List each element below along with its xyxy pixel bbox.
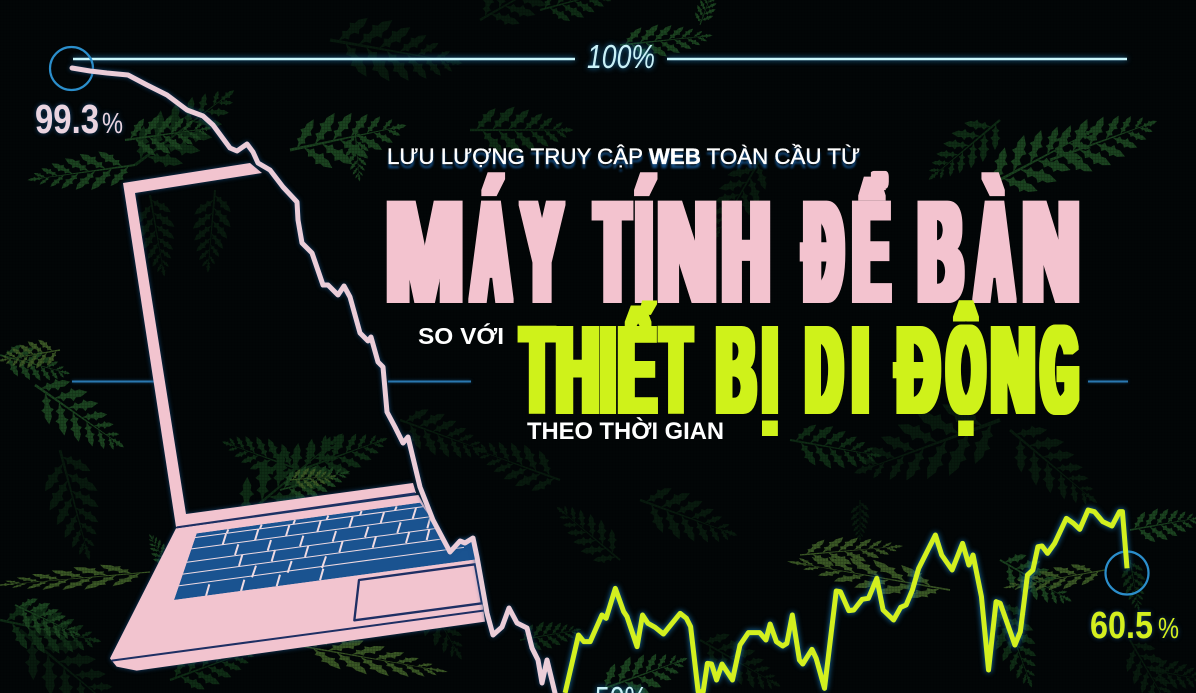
title: desktop: M — [386, 173, 463, 332]
title: mobile: N — [991, 302, 1035, 440]
end marker circle — [1106, 552, 1148, 594]
keyboard — [174, 500, 480, 600]
trackpad — [354, 564, 482, 620]
title: desktop: H — [723, 173, 769, 332]
connector text: theo thời gian: THEO THỜI GIAN — [527, 417, 724, 445]
title: mobile: B — [717, 302, 755, 440]
title: desktop: À — [976, 173, 1012, 332]
title: mobile: I — [852, 302, 868, 440]
desktop traffic line (pink) — [72, 68, 555, 693]
infographic canvas: G — [1042, 302, 1078, 440]
title: desktop: Đ — [805, 173, 842, 332]
title: mobile: Ị — [763, 302, 777, 440]
connector text: so với: SO VỚI — [418, 322, 504, 349]
title: desktop: Á — [472, 173, 510, 332]
front edge line — [112, 611, 483, 661]
title: mobile: T — [662, 302, 690, 440]
title: mobile: Ộ — [948, 302, 984, 440]
title: desktop: N — [1023, 173, 1079, 332]
label: 100%: 100% — [587, 38, 655, 75]
label: 60.5% mobile end value: 60.5 — [1090, 605, 1153, 647]
hinge line — [177, 493, 415, 527]
title: mobile: Ế — [619, 302, 656, 440]
50 percent guide line — [72, 380, 1128, 382]
mobile traffic line (lime) — [565, 510, 1127, 693]
subtitle: intro line: LƯU LƯỢNG TRUY CẬP WEB TOÀN CẦU TỪ — [387, 144, 860, 169]
title: mobile: H — [556, 302, 599, 440]
laptop screen frame — [123, 163, 416, 527]
title: desktop: T — [596, 173, 628, 332]
title: mobile: Đ — [897, 302, 939, 440]
label: 60.5% mobile end value: % — [1158, 613, 1179, 645]
title: mobile: D — [806, 302, 842, 440]
start marker circle — [50, 47, 93, 90]
title: desktop: N — [658, 173, 716, 332]
title: mobile: T — [522, 302, 552, 440]
title: desktop: B — [919, 173, 962, 332]
laptop base — [110, 493, 485, 671]
100 percent guide line — [73, 58, 1127, 60]
label: 99.3% desktop start value: 99.3 — [35, 96, 99, 142]
icon: laptop — [110, 163, 485, 671]
title: desktop: Ể — [854, 173, 888, 332]
title: desktop: Y — [523, 173, 560, 332]
label: 99.3% desktop start value: % — [102, 108, 123, 140]
title: desktop: Í — [637, 173, 652, 332]
title: mobile: I — [601, 302, 615, 440]
